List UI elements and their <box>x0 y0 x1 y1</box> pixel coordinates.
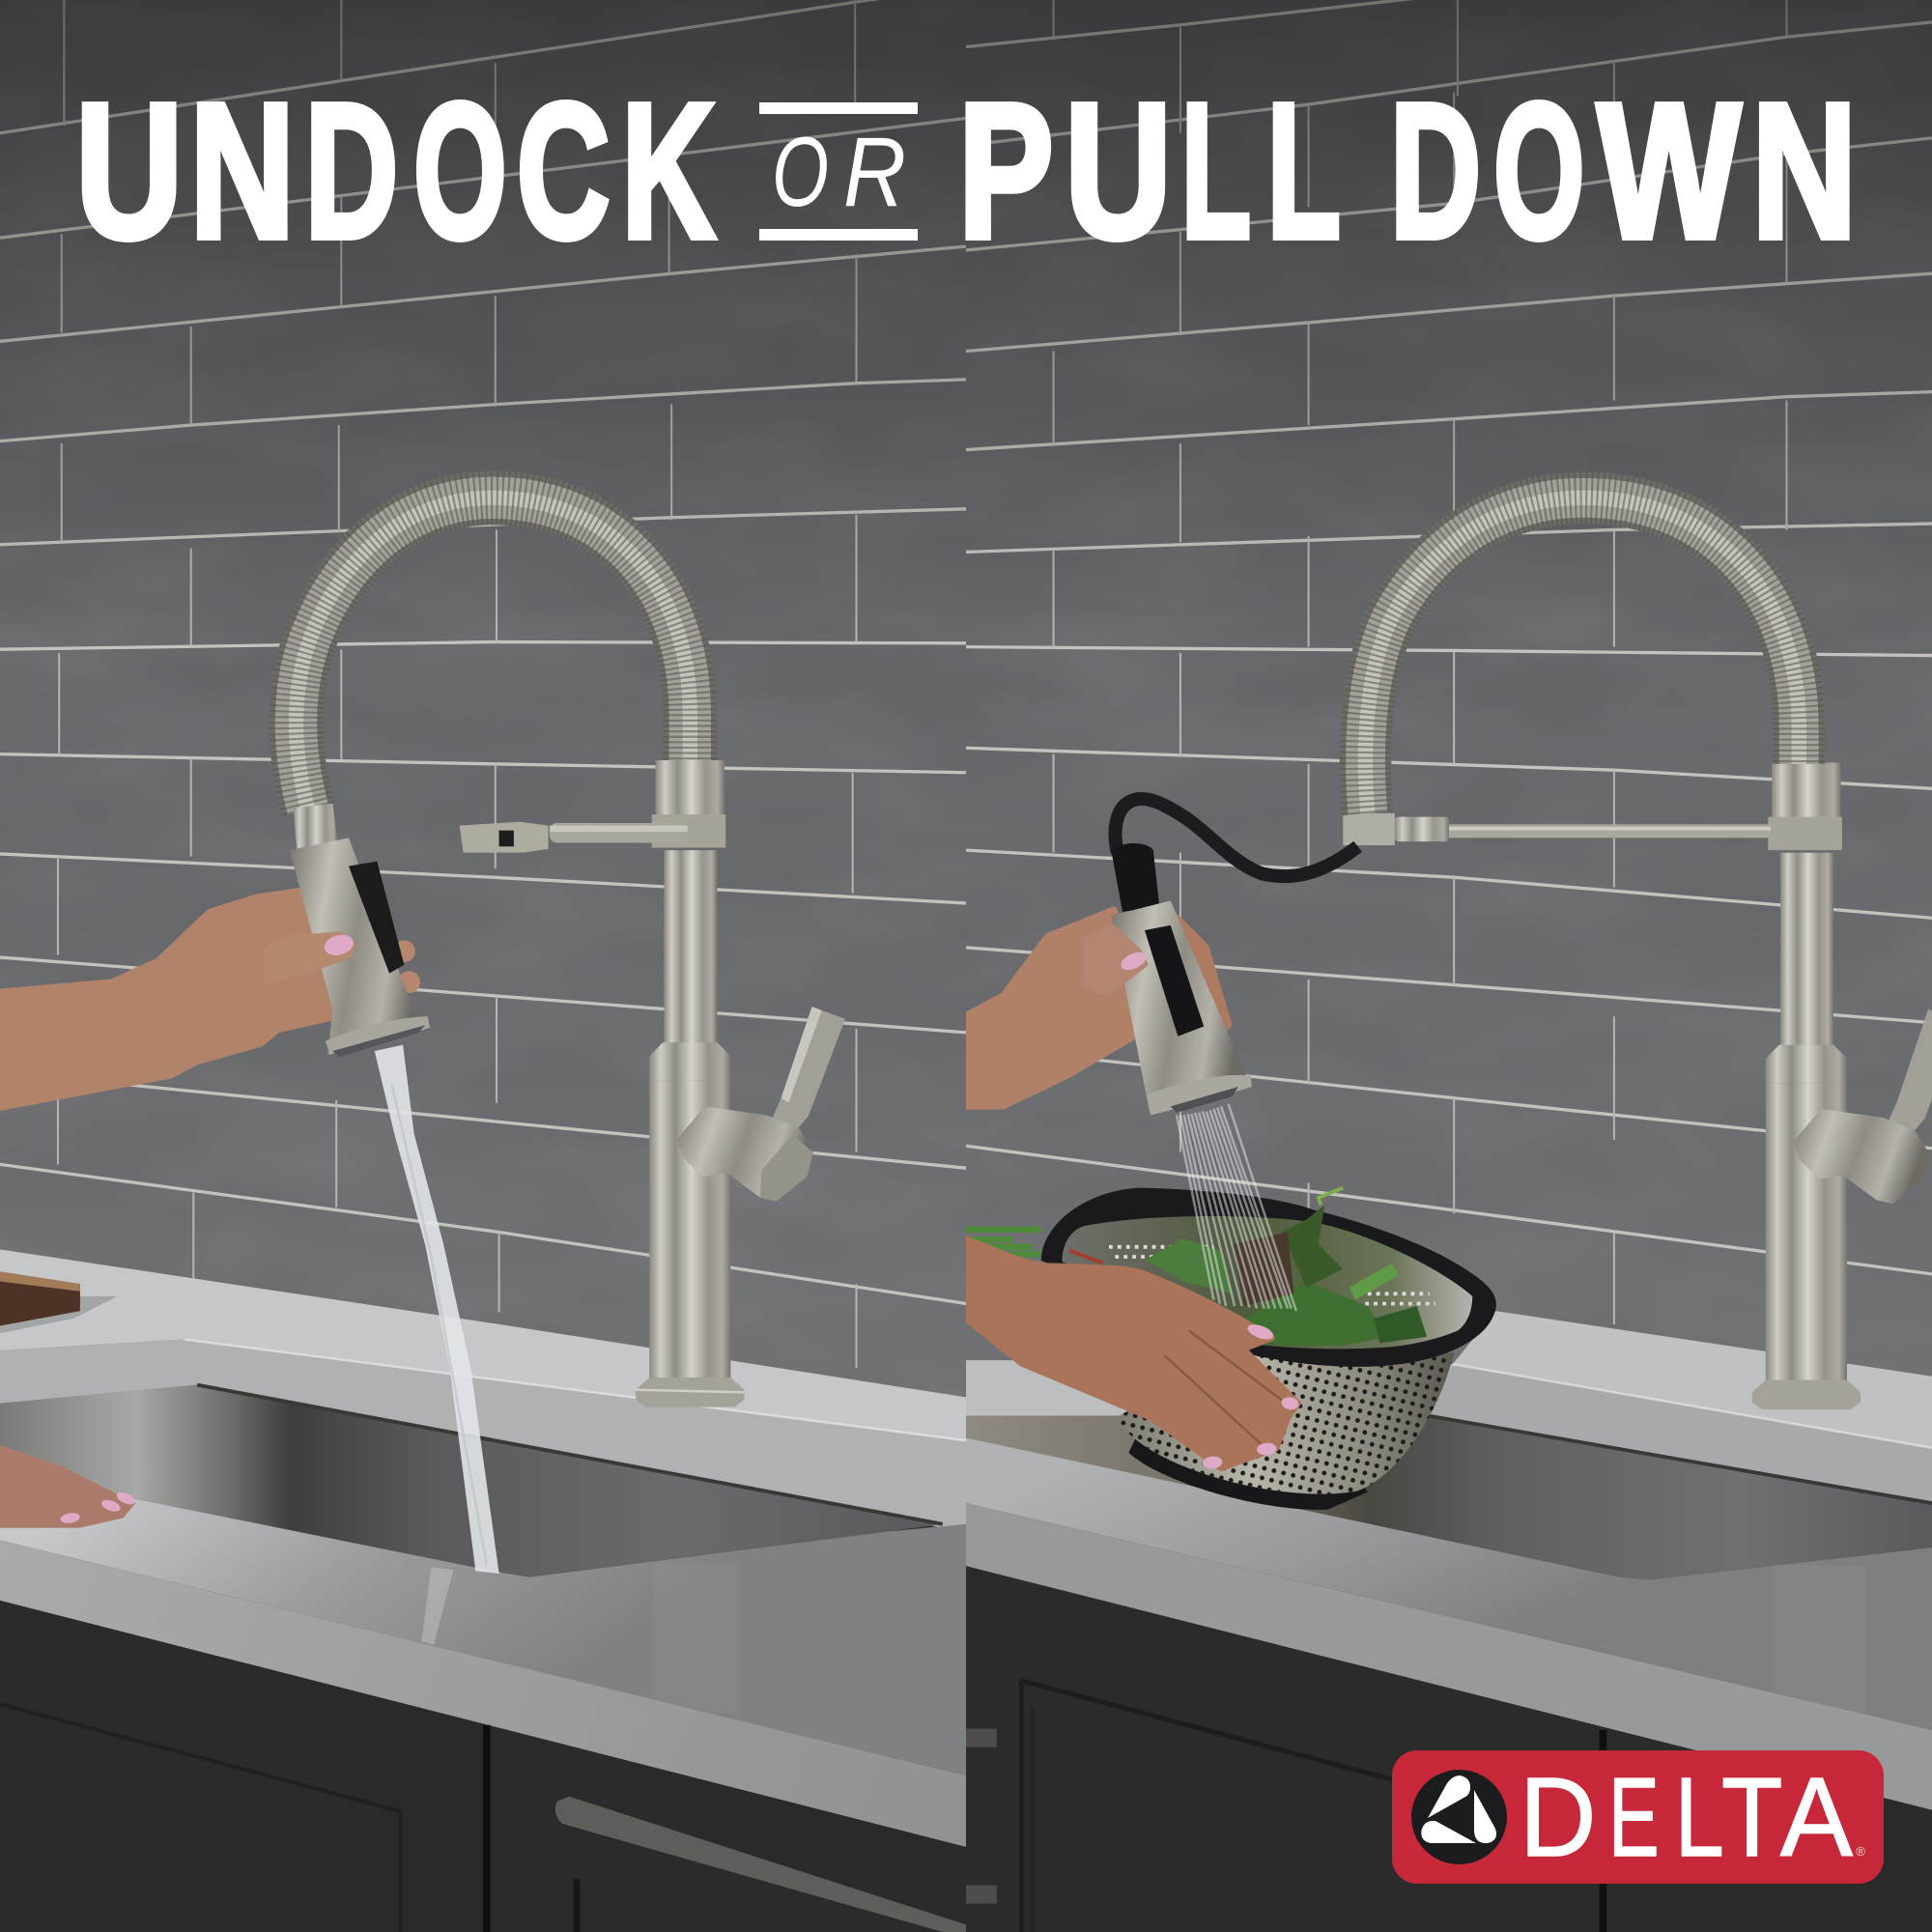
counter surface left <box>0 1474 966 1776</box>
black pull-down hose <box>1116 799 1358 876</box>
dock arm left <box>460 822 688 853</box>
wordmark: L <box>1675 1754 1724 1880</box>
divider word: or: O <box>772 117 829 227</box>
spray head left <box>290 804 430 1057</box>
wordmark: D <box>1520 1754 1596 1880</box>
delta logo badge <box>1392 1750 1884 1884</box>
coiled hose left <box>297 497 690 810</box>
tile wall right <box>966 0 1932 1479</box>
heading: pull down: U <box>1065 64 1172 278</box>
countertop back right <box>966 1311 1932 1506</box>
counter edge left <box>0 1540 966 1847</box>
faucet column right <box>1752 763 1932 1409</box>
heading: pull down: P <box>958 64 1054 278</box>
counter edge right <box>966 1503 1932 1810</box>
thumb left <box>312 931 355 968</box>
heading: pull down: L <box>1181 64 1251 278</box>
water stream left <box>375 1045 499 1574</box>
heading: undock: U <box>75 64 183 278</box>
panel: right pull down photo <box>966 0 1932 1932</box>
divider word: or: R <box>843 117 906 227</box>
cabinet right <box>966 1566 1932 1932</box>
panel: left undock photo <box>0 0 966 1932</box>
cutting board <box>0 1271 80 1325</box>
sink basin left <box>0 1385 943 1577</box>
colander <box>1041 1188 1496 1510</box>
cabinet left <box>0 1601 966 1932</box>
arm and hand left <box>0 891 331 1108</box>
docking arm right <box>1343 813 1771 845</box>
heading: pull down: W <box>1598 64 1741 278</box>
spray head right <box>1112 843 1252 1115</box>
countertop back left <box>0 1249 966 1528</box>
scallions <box>966 1230 1041 1254</box>
registered mark: ® <box>1856 1844 1865 1859</box>
lower hand right <box>966 1238 1299 1469</box>
salad greens <box>1069 1188 1427 1346</box>
heading: pull down: L <box>1267 64 1339 278</box>
water spray right <box>1177 1104 1296 1311</box>
coiled hose right <box>1366 497 1799 813</box>
sink basin right <box>966 1416 1932 1579</box>
heading: pull down: N <box>1752 64 1857 278</box>
heading: pull down: O <box>1493 64 1584 278</box>
heading: pull down: D <box>1390 64 1481 278</box>
thumb right <box>1084 926 1149 996</box>
title <box>75 64 1857 278</box>
resting hand left <box>0 1445 137 1528</box>
lever handle left <box>676 1007 845 1202</box>
heading: undock: O <box>413 64 507 278</box>
palm right <box>966 909 1140 1106</box>
fingertips behind head left <box>398 940 420 993</box>
upper hand fingers right <box>1177 917 1230 1033</box>
heading: undock: N <box>189 64 295 278</box>
icon: delta triangle mark <box>1411 1770 1507 1864</box>
heading: undock: C <box>517 64 610 278</box>
wordmark: T <box>1721 1754 1782 1880</box>
divider word: or <box>759 102 918 241</box>
heading: undock: D <box>305 64 398 278</box>
counter surface right <box>966 1438 1932 1730</box>
wordmark: A <box>1780 1754 1853 1880</box>
wordmark: E <box>1608 1754 1660 1880</box>
heading: undock: K <box>622 64 715 278</box>
faucet column left <box>636 760 744 1407</box>
tile wall left <box>0 0 966 1430</box>
